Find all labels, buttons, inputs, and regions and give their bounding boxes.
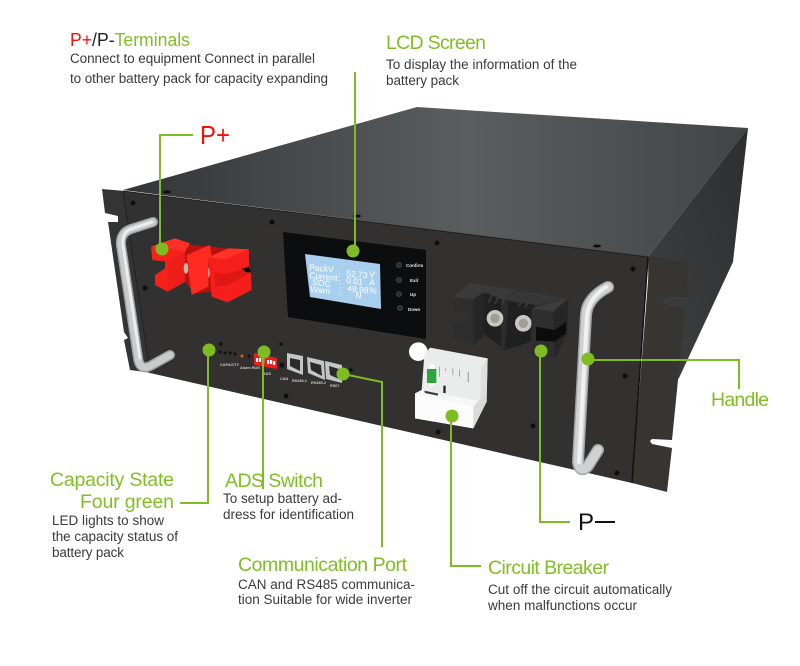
LCD screen: Current xyxy=(309,270,339,283)
LCD screen: V xyxy=(369,269,376,280)
callout: LCD Screen: battery pack xyxy=(386,73,459,88)
DIP switch xyxy=(254,353,277,369)
right rack ear xyxy=(632,256,688,492)
callout: P-: P xyxy=(578,509,594,536)
callout: P+/P- Terminals: to other battery pack for capacity expanding xyxy=(70,71,328,86)
LCD buttons: Up xyxy=(410,292,416,297)
callout: ADS Switch: ADS Switch xyxy=(225,470,323,492)
LCD buttons: Exit xyxy=(410,278,419,283)
callout: LCD Screen xyxy=(346,32,577,258)
callout: Communication Port: CAN and RS485 communica- xyxy=(238,577,415,592)
LCD screen: Warn xyxy=(310,284,331,296)
LCD screen: : xyxy=(338,273,340,283)
icon: black negative terminal cover xyxy=(453,283,568,358)
callout: P+ xyxy=(156,120,230,256)
LCD screen: 49.98 xyxy=(347,283,369,295)
control strip: LEDs, DIP switch and ports: ADS xyxy=(263,372,271,376)
right side face xyxy=(648,128,748,400)
battery pack product image xyxy=(102,107,748,492)
callout: Capacity State: the capacity status of xyxy=(52,529,178,544)
LCD screen: : xyxy=(339,280,341,290)
front panel xyxy=(123,191,648,483)
left rack ear xyxy=(102,189,152,373)
edge highlights xyxy=(123,191,648,257)
callout: Capacity State: Four green xyxy=(80,491,174,513)
callout: Capacity State: battery pack xyxy=(52,545,124,560)
control strip: LEDs, DIP switch and ports: RS485-1 xyxy=(292,379,307,383)
LCD buttons: Down xyxy=(408,307,420,312)
LCD screen: 52.73 xyxy=(346,268,368,280)
callout: Capacity State: LED lights to show xyxy=(52,513,164,528)
LCD screen xyxy=(305,254,381,309)
LCD screen: SOC xyxy=(312,277,331,289)
callout: P+/P- Terminals: P+/P-Terminals xyxy=(70,30,190,50)
LCD screen: 0.01 xyxy=(346,275,364,287)
callout: ADS Switch: dress for identification xyxy=(223,507,354,522)
LCD screen: % xyxy=(369,285,378,296)
LCD screen: : xyxy=(338,266,340,276)
icon: left handle xyxy=(121,222,170,367)
callout: P+: P+ xyxy=(200,120,230,150)
callout: P- xyxy=(534,344,615,536)
control strip: LEDs, DIP switch and ports: Alarm RUN xyxy=(240,366,260,370)
top face xyxy=(123,107,748,257)
LCD buttons: Confirm xyxy=(406,263,423,268)
callout: Communication Port xyxy=(238,368,415,607)
LCD panel xyxy=(283,232,426,339)
callout: Circuit Breaker xyxy=(446,410,672,613)
callout: Communication Port: tion Suitable for wide inverter xyxy=(238,592,412,607)
callout: Handle: Handle xyxy=(711,389,769,411)
icon: right handle xyxy=(578,287,608,469)
control strip: LEDs, DIP switch and ports: RS485-2 xyxy=(311,381,326,385)
callout: P+/P- Terminals xyxy=(70,30,328,86)
callout: ADS Switch: To setup battery ad- xyxy=(223,491,342,506)
callout: LCD Screen: LCD Screen xyxy=(386,32,486,54)
callout: P+/P- Terminals: Connect to equipment Connect in parallel xyxy=(70,51,315,66)
callout: Communication Port: Communication Port xyxy=(238,554,408,576)
callout: Capacity State: Capacity State xyxy=(50,469,174,491)
ports xyxy=(287,353,303,375)
LCD buttons xyxy=(396,262,423,312)
callout: Handle xyxy=(582,352,769,411)
control strip: LEDs, DIP switch and ports xyxy=(218,342,353,388)
callout: ADS Switch xyxy=(223,346,354,522)
screw holes xyxy=(130,190,636,476)
control strip: LEDs, DIP switch and ports: CAPACITY xyxy=(220,363,240,367)
callout: Circuit Breaker: Cut off the circuit automatically xyxy=(488,582,672,597)
callout: Circuit Breaker: when malfunctions occur xyxy=(487,598,638,613)
LCD screen: A xyxy=(369,277,376,288)
callout: LCD Screen: To display the information of the xyxy=(386,57,577,72)
callout: Circuit Breaker: Circuit Breaker xyxy=(488,557,610,579)
control strip: LEDs, DIP switch and ports: CAN xyxy=(280,377,288,381)
icon: red positive terminal cover xyxy=(151,238,252,302)
control strip: LEDs, DIP switch and ports: RS07 xyxy=(330,384,340,388)
LCD screen: : xyxy=(339,287,341,297)
LCD screen: PackV xyxy=(309,262,335,275)
LCD screen: N xyxy=(355,290,362,301)
icon: circuit breaker xyxy=(409,342,488,428)
callout: Capacity State xyxy=(50,344,216,560)
